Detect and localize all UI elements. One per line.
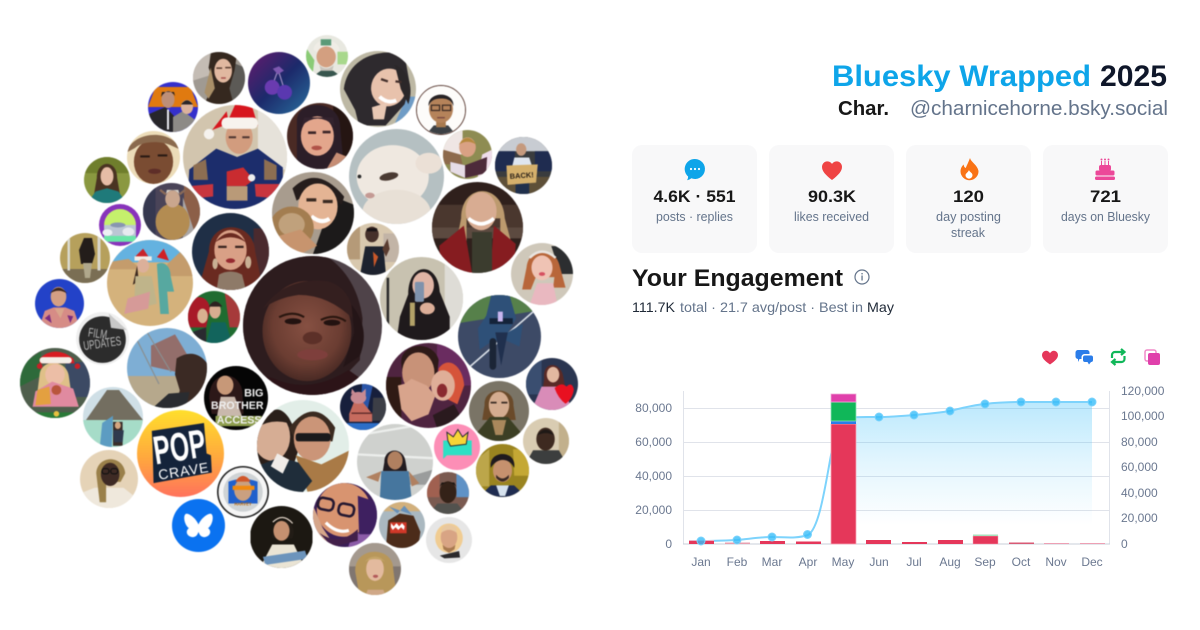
line data points [697, 398, 1096, 545]
right axis labels: 20,000 [1121, 511, 1158, 525]
month labels: Sep [974, 555, 996, 569]
avatar: bitmoji with glasses [416, 85, 466, 135]
avatar: sketch of blond man [426, 517, 472, 563]
avatar: Big Brother Access: BROTHER [211, 400, 264, 412]
avatar: Big Brother Access [203, 365, 269, 431]
engagement summary: total · 21.7 avg/post · Best in [680, 299, 863, 315]
stat card: posting streak: streak [951, 226, 986, 240]
avatar: Bluesky butterfly [172, 499, 225, 552]
icon: chat bubble [685, 159, 705, 180]
left axis labels [635, 401, 672, 551]
right axis labels: 60,000 [1121, 460, 1158, 474]
user name and handle: Char. [838, 98, 889, 120]
month labels [691, 555, 1103, 569]
right axis labels [1121, 384, 1165, 551]
avatar: Pop Crave logo [137, 410, 224, 497]
right axis labels: 80,000 [1121, 435, 1158, 449]
stat card: posting streak: day posting [936, 210, 1001, 224]
month labels: Nov [1045, 555, 1067, 569]
left axis labels: 20,000 [635, 503, 672, 517]
stat card: likes [769, 145, 894, 253]
month labels: Mar [762, 555, 782, 569]
stat card: likes: likes received [794, 210, 869, 224]
avatar: man in bun costume [142, 182, 201, 241]
icon: heart [822, 161, 842, 180]
engagement chart [635, 384, 1165, 569]
avatar: purple ring with clouds [98, 203, 142, 247]
avatar: woman with long hair [192, 51, 246, 105]
stat card: days on Bluesky [1043, 145, 1168, 253]
avatar: kissing selfie with fingers [385, 342, 472, 429]
stat card: posting streak: 120 [953, 187, 984, 206]
right axis labels: 100,000 [1121, 409, 1165, 423]
avatar: selfie with mirror phone [380, 256, 464, 341]
cumulative area and line [701, 402, 1092, 544]
right axis labels: 120,000 [1121, 384, 1165, 398]
avatar: girl in blue sweater, dark room [250, 506, 313, 568]
month labels: Jan [691, 555, 711, 569]
chart legend icons [1042, 349, 1160, 365]
title: Bluesky Wrapped [832, 60, 1091, 93]
avatar bubble cluster [19, 34, 579, 596]
stat card: posts and replies [632, 145, 757, 253]
icon: like legend [1042, 351, 1058, 364]
avatar: large central selfie [242, 255, 383, 396]
engagement summary: 111.7K [632, 299, 676, 315]
avatar: man gazing under bare tree [126, 327, 208, 409]
avatar: purple-haired woman [286, 102, 354, 170]
left axis labels: 0 [665, 537, 672, 551]
avatar: man with protest sign [494, 136, 553, 195]
avatar: Dexter in santa hat [182, 104, 288, 210]
avatar: man on beige wall [522, 418, 570, 465]
avatar: Big Brother Access: BIG [244, 388, 264, 400]
avatar: cherries on purple [247, 51, 311, 115]
left axis labels: 40,000 [635, 469, 672, 483]
avatar: person among yellow trees [59, 232, 111, 284]
left axis labels: 80,000 [635, 401, 672, 415]
avatar: blonde woman in red coat [431, 181, 524, 274]
avatar: Christmas couple in desert [106, 239, 194, 327]
icon: reply legend [1076, 350, 1093, 364]
stat card: days on Bluesky: days on Bluesky [1061, 210, 1151, 224]
avatar: circled orange-blindfold emblem [217, 466, 269, 518]
avatar: kissing couple at Christmas [187, 290, 241, 344]
avatar: woman in denim vest [356, 424, 434, 501]
heading: Your Engagement: Your Engagement [632, 265, 843, 292]
stacked monthly bars [689, 394, 1105, 544]
avatar: woman in blue shirt [34, 278, 85, 329]
avatar: girl in tan hat [126, 130, 180, 185]
month labels: Apr [799, 555, 817, 569]
avatar: woman on green background [83, 156, 131, 204]
avatar: Pop Crave logo: CRAVE [157, 459, 209, 483]
left axis labels: 60,000 [635, 435, 672, 449]
avatar: woman reading book [442, 129, 492, 180]
avatar: blonde curly woman [349, 543, 401, 595]
icon: repost legend [1112, 349, 1124, 365]
avatar: young woman with headband [510, 242, 574, 306]
avatar: renaissance woman [468, 380, 530, 442]
avatar: Big Brother Access: ACCESS [217, 415, 262, 427]
month labels: Dec [1081, 555, 1103, 569]
avatar: bright pig on chair [339, 383, 387, 431]
avatar: red-haired woman in dark room [191, 212, 270, 291]
avatar: man hugging small dog [271, 171, 355, 255]
avatar: man with cap among buildings [427, 472, 469, 514]
avatar: man at cabin [83, 387, 143, 447]
avatar: man on bicycle [457, 294, 542, 379]
month labels: Aug [939, 555, 961, 569]
avatar: Domo plush [379, 502, 425, 548]
icon: info [855, 270, 869, 284]
avatar: man with protest sign: BACK! [509, 170, 534, 181]
avatar: two men with sunglasses and Keanu [256, 400, 350, 493]
avatar: Film Updates sticker [76, 312, 129, 365]
month labels: Jul [906, 555, 922, 569]
icon: quote legend [1145, 350, 1160, 365]
icon: cake [1095, 158, 1115, 180]
avatar: sheep plush [348, 128, 444, 224]
right axis labels: 0 [1121, 537, 1128, 551]
stat card: posts and replies: 4.6K · 551 [654, 187, 736, 206]
avatar: Film Updates sticker: FILM [87, 324, 108, 342]
right axis labels: 40,000 [1121, 486, 1158, 500]
icon: flame [960, 158, 979, 180]
avatar: man in white cap [305, 34, 349, 78]
month labels: Jun [869, 555, 889, 569]
month labels: May [832, 555, 854, 569]
avatar: girl with braids and glasses [80, 450, 138, 508]
avatar: bald man with glasses purple tint [313, 483, 377, 547]
engagement summary [632, 299, 894, 315]
stat card: days on Bluesky: 721 [1090, 187, 1121, 206]
stat card: likes: 90.3K [808, 187, 857, 206]
avatar: Santa-hat blonde girl [19, 347, 91, 419]
stat card: posts and replies: posts · replies [656, 210, 733, 224]
avatar: man in vote background [147, 81, 199, 133]
avatar: smiling man in suit [475, 443, 530, 498]
stat card: posting streak [906, 145, 1031, 253]
title: 2025 [1100, 60, 1167, 93]
engagement summary: May [867, 299, 894, 315]
avatar: woman with red heart [525, 357, 579, 411]
avatar: crown and chat bubble logo [433, 423, 481, 471]
user name and handle: @charnicehorne.bsky.social [910, 98, 1168, 120]
month labels: Feb [727, 555, 748, 569]
month labels: Oct [1012, 555, 1031, 569]
avatar: circled orange-blindfold emblem: HARVEY [234, 502, 252, 507]
avatar: woman in black, selfie in bookshelf room [346, 222, 400, 276]
avatar: dark-haired smiling woman [340, 50, 416, 128]
